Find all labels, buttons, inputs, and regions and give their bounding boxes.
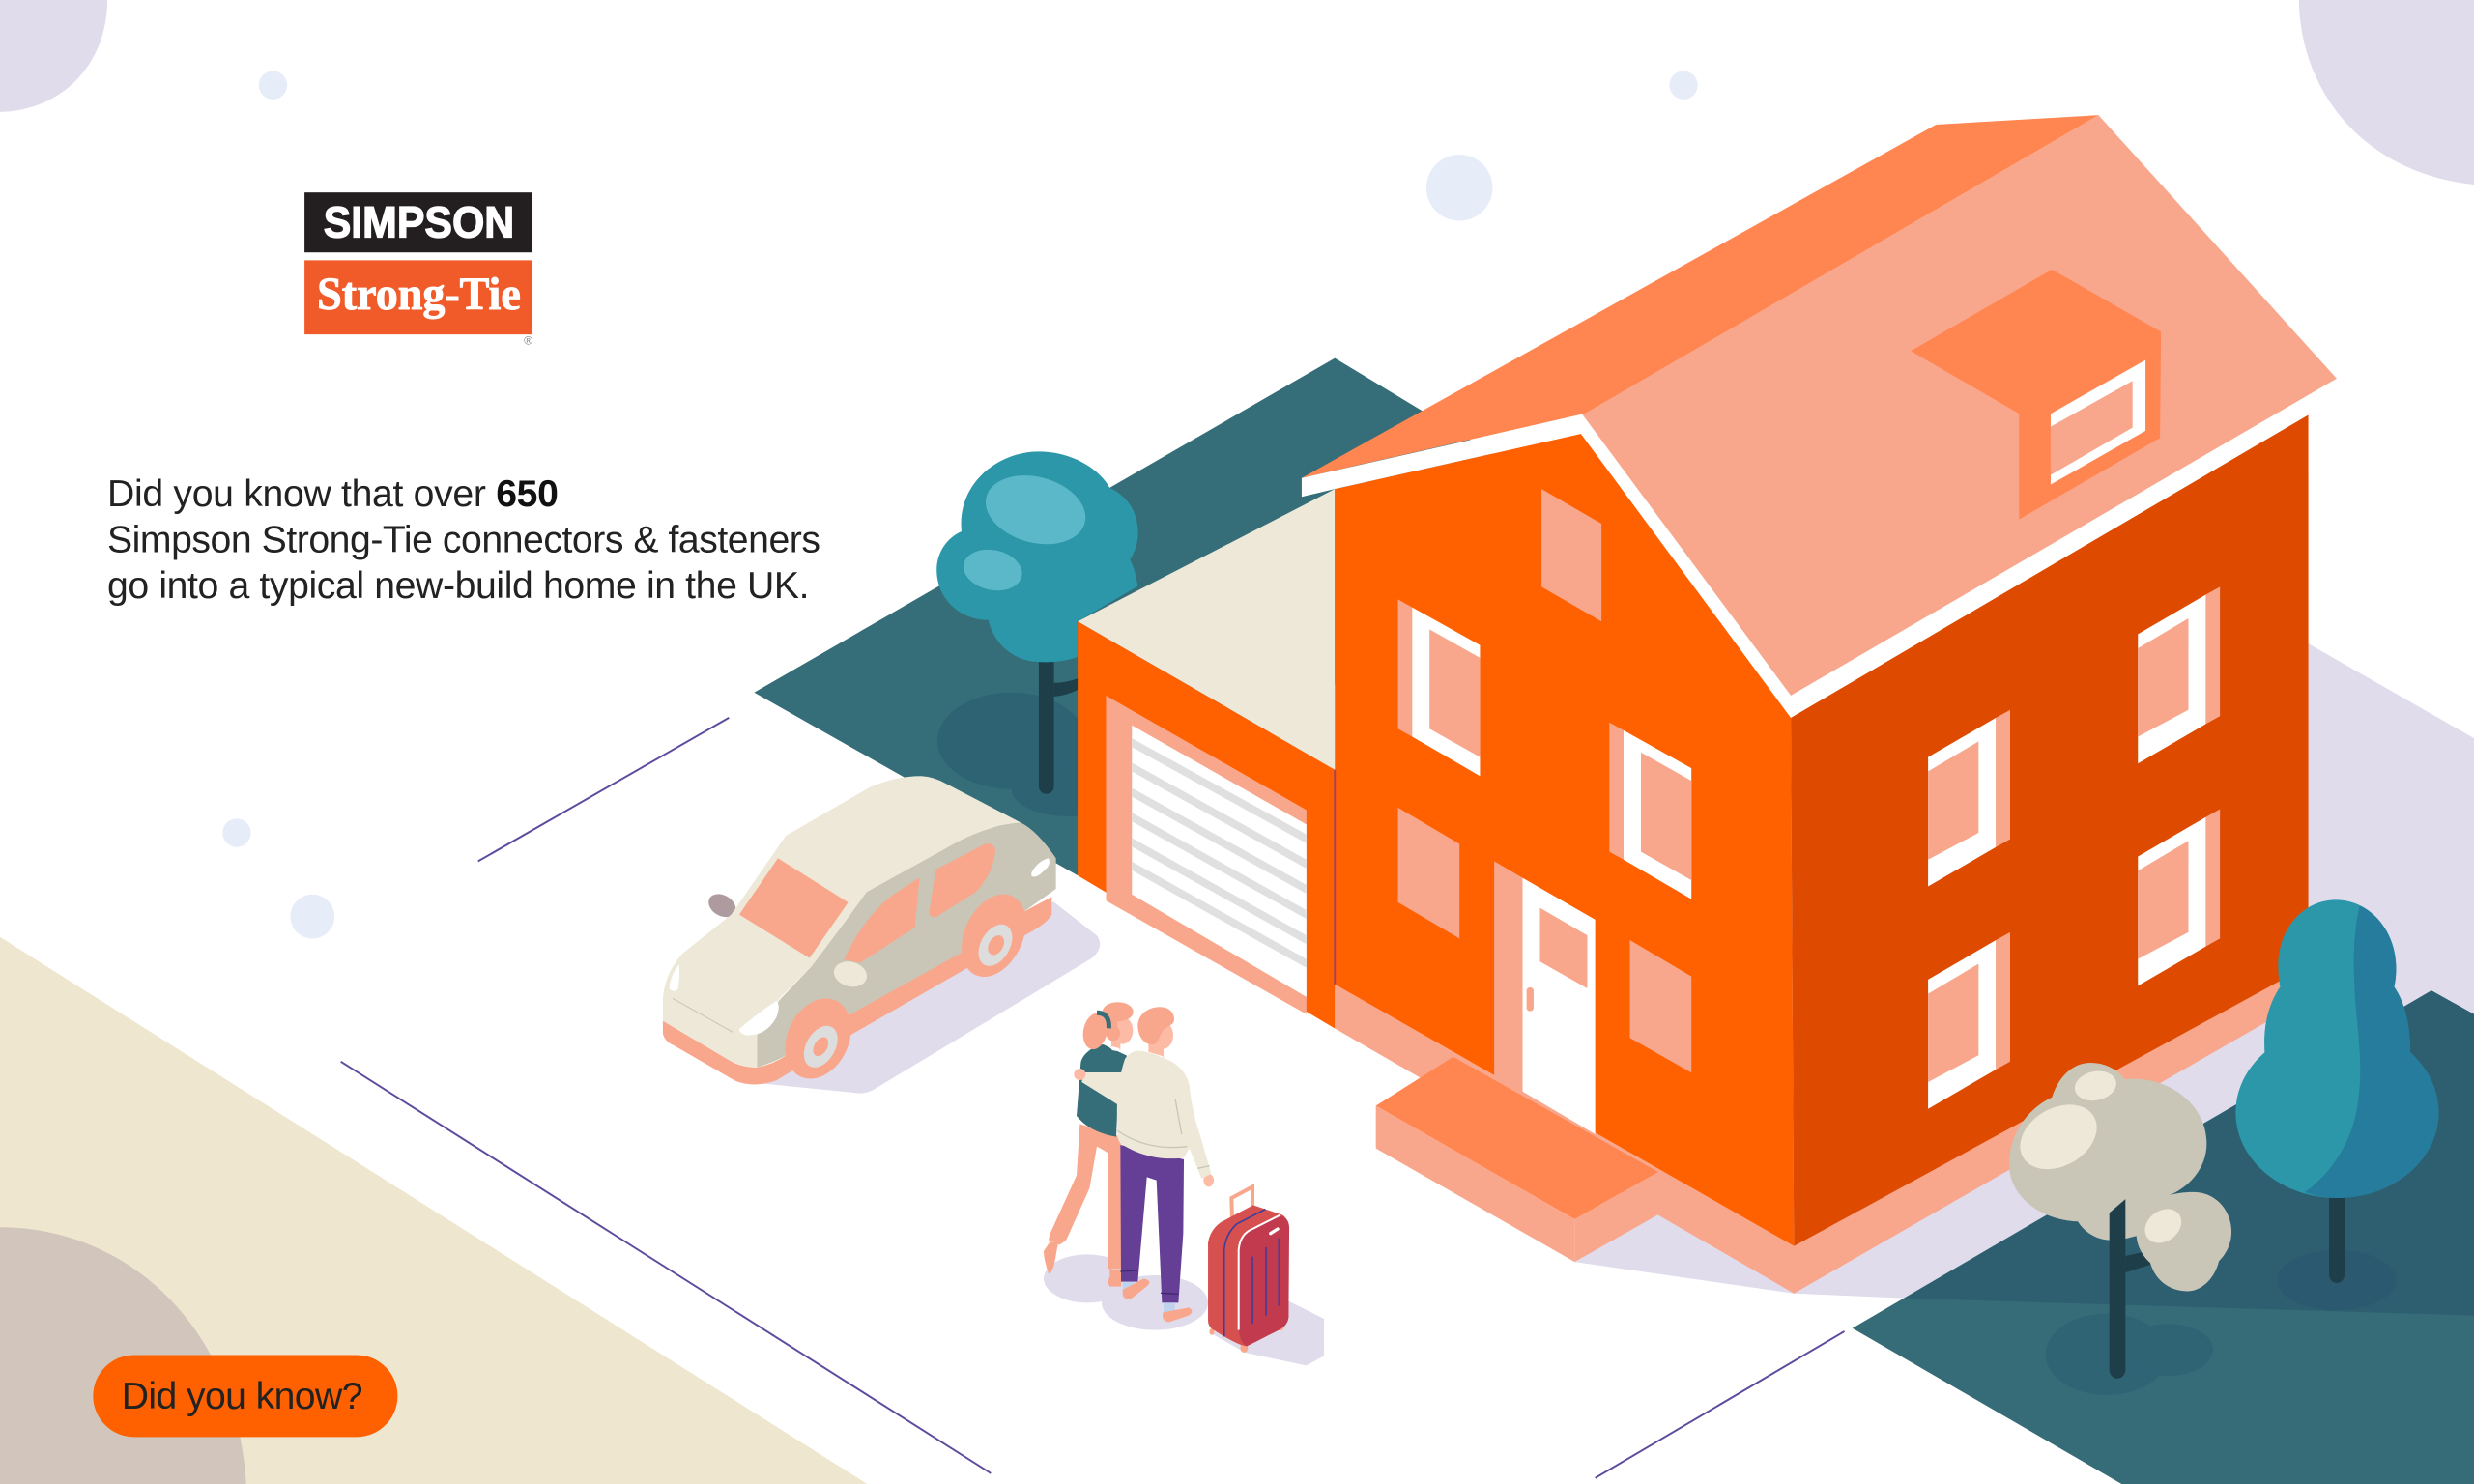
garage wall	[1078, 621, 1335, 1028]
intro text: Simpson Strong-Tie connectors & fasteners	[107, 519, 820, 560]
front window: gable	[1541, 489, 1601, 621]
house front wall	[1335, 434, 1794, 1246]
dormer window	[2051, 360, 2145, 485]
road lines	[341, 718, 1845, 1478]
ground: garden shadow	[1905, 990, 2474, 1316]
car lights	[670, 858, 1050, 1036]
logo: registered mark: ®	[524, 334, 532, 348]
garage roof	[1078, 489, 1335, 770]
ground: beige lawn	[0, 937, 868, 1484]
intro text: Did you know that over 650	[107, 473, 559, 515]
front window: upper middle	[1609, 723, 1691, 899]
roof: front slope	[1302, 115, 2098, 478]
tree: left	[936, 451, 1138, 816]
front window: lower right	[1630, 940, 1691, 1072]
button: did you know	[93, 1355, 397, 1437]
side window: upper left	[1928, 710, 2010, 887]
front window: upper left	[1398, 599, 1480, 776]
side window: lower right	[2138, 810, 2220, 985]
dormer pane	[2051, 381, 2133, 475]
garage door frame	[1106, 696, 1307, 1014]
corner blob: top right	[2299, 0, 2474, 185]
car mirror	[705, 890, 740, 922]
roof fascia	[1302, 379, 2337, 718]
doorstep	[1376, 1057, 1658, 1262]
house side wall	[1791, 414, 2309, 1246]
front door	[1494, 861, 1596, 1134]
logo: strong-tie wordmark: Strong-Tie	[317, 270, 521, 320]
ground: teal garden	[1853, 990, 2474, 1484]
dormer body	[1911, 270, 2161, 520]
man	[1074, 1007, 1214, 1322]
floating circles	[222, 71, 1698, 938]
car top	[663, 776, 1021, 1068]
button: did you know: Did you know?	[122, 1376, 363, 1417]
logo	[304, 192, 532, 348]
side window: lower left	[1928, 932, 2010, 1109]
car side windows	[844, 843, 995, 963]
car windscreen	[739, 858, 849, 958]
intro text: go into a typical new-build home in the UK.	[107, 565, 810, 607]
logo: orange panel	[304, 260, 532, 334]
logo: simpson wordmark: SIMPSON	[324, 198, 514, 247]
corner blob: top left	[0, 0, 107, 112]
wall seam	[1334, 770, 1336, 985]
couple and suitcase	[1044, 1002, 1324, 1365]
roof: side slope	[1583, 115, 2337, 696]
car	[663, 776, 1100, 1094]
house plinth	[1335, 965, 2280, 1294]
intro text	[107, 473, 820, 607]
car hood line	[673, 998, 733, 1032]
ground: corner blob	[0, 1227, 246, 1484]
car wheels	[773, 884, 1039, 1090]
car near mirror	[831, 958, 870, 990]
dormer	[1911, 270, 2161, 520]
car base	[663, 897, 1051, 1084]
ground: lilac side plot and house shadow	[1574, 643, 2474, 1298]
garage door slats	[1132, 738, 1307, 968]
tree: blue right	[2235, 899, 2438, 1310]
logo: black panel	[304, 192, 532, 252]
garage	[1078, 489, 1335, 1028]
ground: teal plot behind house	[754, 358, 1578, 875]
suitcase	[1208, 1186, 1289, 1353]
woman	[1044, 1002, 1134, 1287]
car shadow	[763, 901, 1100, 1094]
shadows	[1044, 1254, 1324, 1365]
tree: grey right	[2009, 1063, 2231, 1395]
car side	[757, 823, 1056, 1068]
garage door	[1132, 726, 1307, 997]
front window: lower left	[1398, 808, 1459, 938]
side window: upper right	[2138, 586, 2220, 763]
